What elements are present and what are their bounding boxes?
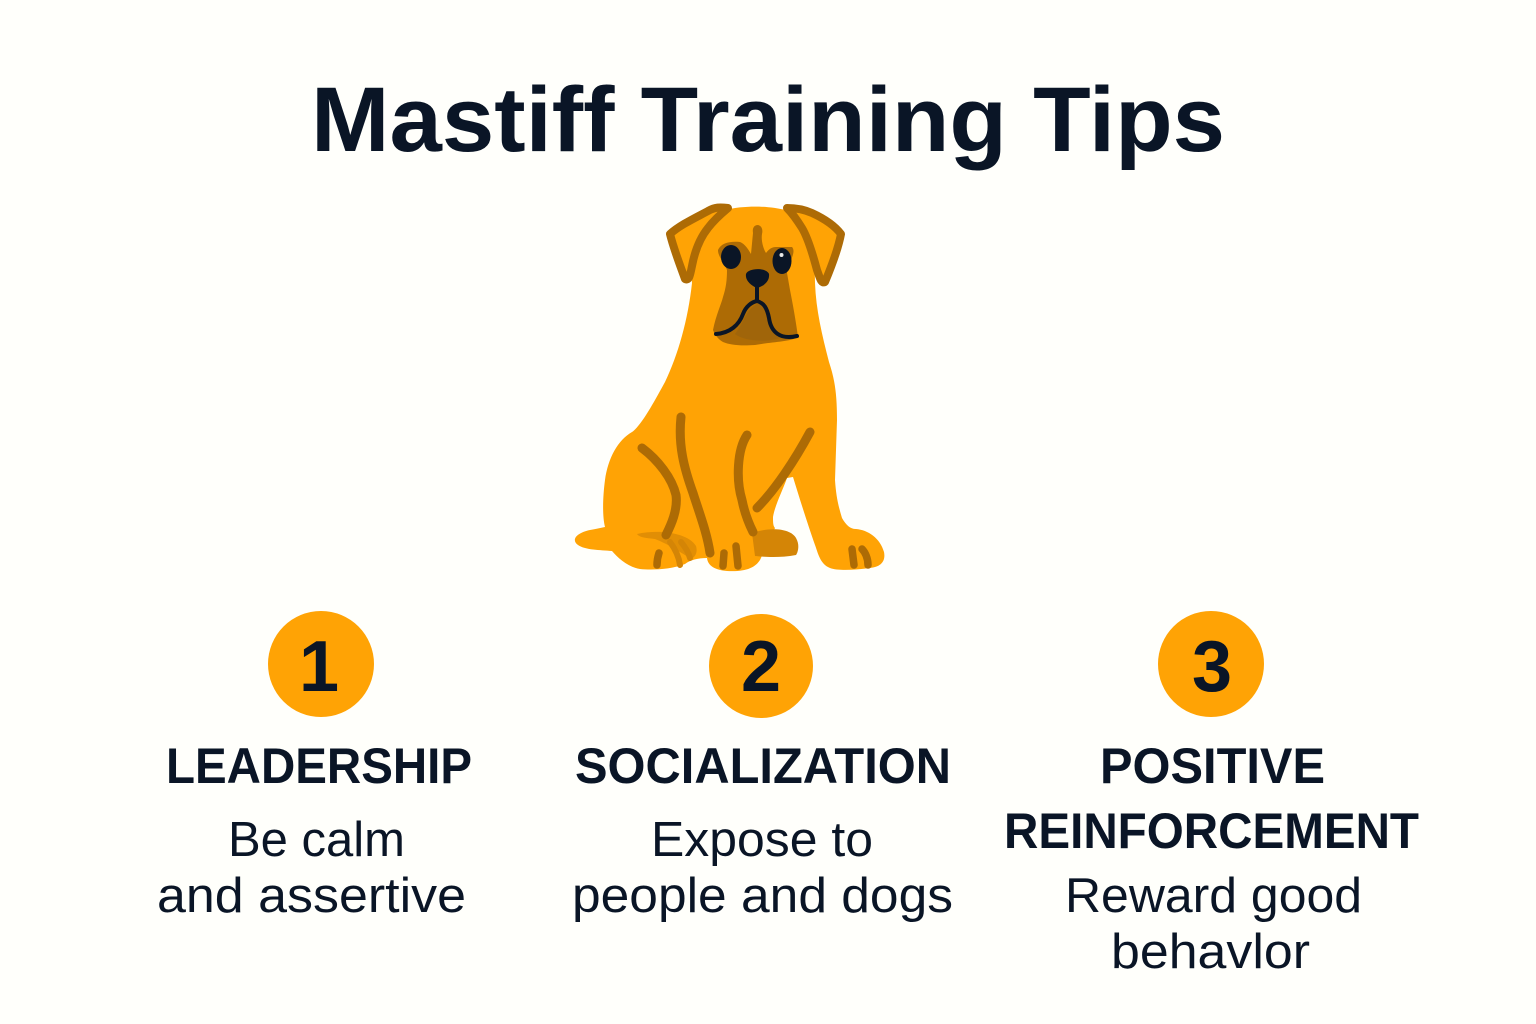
front-left paw shadow: [637, 532, 697, 559]
faint paw toe marks: [670, 542, 690, 565]
description: leadership: and assertive: [157, 869, 466, 923]
title: Mastiff Training Tips: [311, 69, 1225, 171]
muzzle and face mask: [713, 225, 798, 345]
description: positive reinforcement: behavlor: [1111, 925, 1310, 979]
rear paw shadow: [752, 529, 798, 557]
heading: leadership: LEADERSHIP: [166, 738, 472, 794]
right ear: [787, 208, 841, 282]
left eye: [721, 245, 741, 269]
description: socialization: people and dogs: [572, 869, 953, 923]
nose: [746, 269, 769, 288]
dog body silhouette: [575, 207, 884, 571]
description: socialization: Expose to: [651, 813, 873, 867]
toe marks: [657, 546, 868, 566]
heading: socialization: SOCIALIZATION: [575, 738, 951, 794]
description: leadership: Be calm: [228, 813, 405, 867]
tip 2: socialization: [572, 614, 953, 923]
description: positive reinforcement: Reward good: [1065, 869, 1362, 923]
eye highlight: [780, 253, 784, 257]
heading: positive reinforcement: POSITIVE: [1100, 738, 1325, 794]
number 2: 2: [741, 627, 781, 707]
tip 3: positive reinforcement: [1004, 611, 1419, 979]
right eye: [772, 248, 792, 274]
illustration: sitting mastiff: [575, 207, 884, 571]
number 1: 1: [299, 627, 339, 707]
tip 1: leadership: [157, 611, 472, 923]
mouth lines: [716, 287, 797, 337]
number badge 3: [1158, 611, 1264, 717]
number badge 1: [268, 611, 374, 717]
number badge 2: [709, 614, 813, 718]
heading: positive reinforcement: REINFORCEMENT: [1004, 803, 1419, 859]
left ear: [670, 207, 728, 279]
number 3: 3: [1192, 627, 1232, 707]
chin shading: [735, 304, 780, 341]
leg contour strokes: [642, 417, 810, 553]
